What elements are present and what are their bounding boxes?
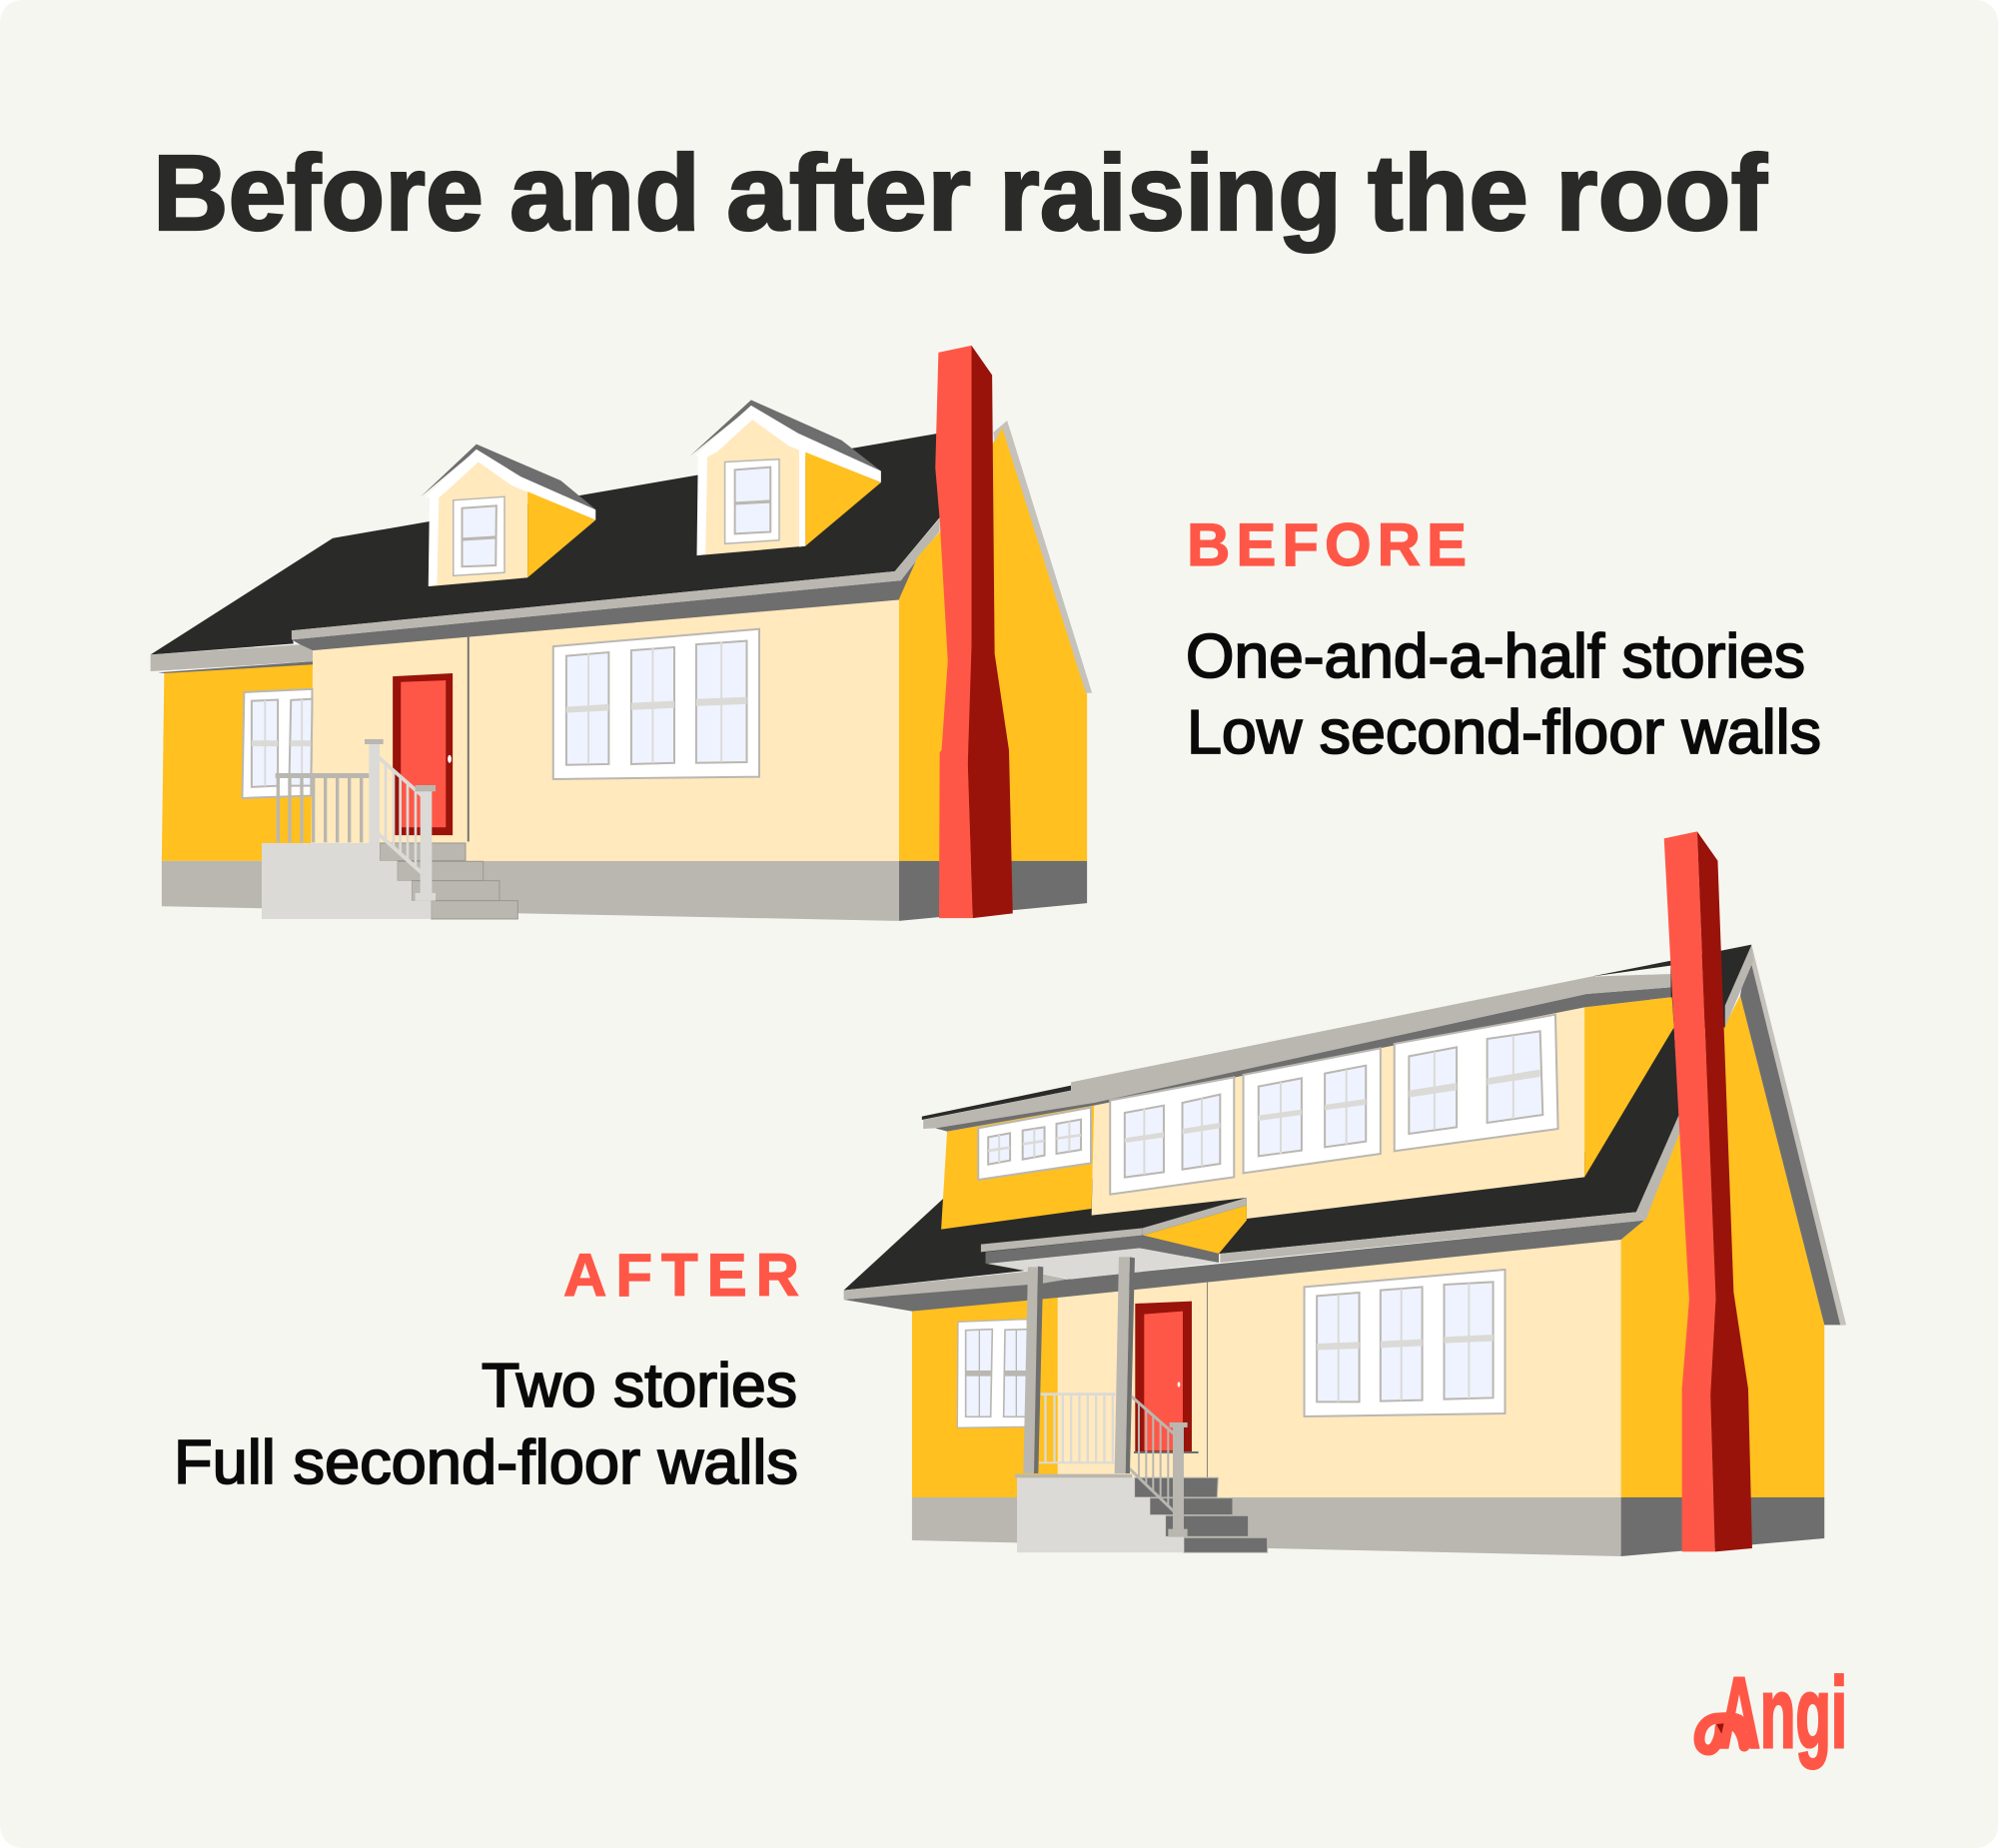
steps — [380, 843, 517, 919]
steps — [1135, 1477, 1268, 1552]
roof — [151, 434, 941, 654]
left fascia — [151, 643, 313, 673]
eave fascia — [844, 1212, 1645, 1312]
dormer 1 — [421, 445, 595, 586]
chimney — [935, 346, 1013, 918]
left wing wall — [162, 663, 313, 861]
after description: Full second-floor walls — [174, 1428, 798, 1497]
stair railing — [365, 739, 436, 901]
before description: One-and-a-half stories — [1186, 622, 1805, 691]
stair railing — [1130, 1394, 1188, 1537]
after description — [174, 1352, 798, 1497]
title — [153, 132, 1768, 253]
title: the — [1368, 132, 1528, 253]
porch railing — [276, 773, 369, 842]
entry porch — [957, 1257, 1268, 1552]
heading: after: AFTER — [563, 1242, 799, 1309]
roof — [844, 945, 1751, 1291]
porch railing — [1039, 1392, 1116, 1463]
gable edge — [1740, 945, 1846, 1325]
right gable wall — [899, 425, 1087, 861]
title: raising — [999, 132, 1342, 253]
dormer 2 — [690, 400, 881, 555]
logo: Angi: Angi — [1718, 1657, 1847, 1769]
front fascia — [292, 518, 940, 650]
main window — [553, 629, 759, 779]
upper fascia — [923, 974, 1670, 1132]
front wall — [1058, 1240, 1621, 1497]
title: roof — [1555, 132, 1768, 253]
door trim line — [468, 637, 470, 841]
before description: Low second-floor walls — [1187, 698, 1821, 767]
door — [393, 673, 453, 835]
logo: Angi — [1699, 1657, 1847, 1769]
left window — [242, 689, 312, 798]
title: Before — [153, 132, 484, 253]
upper window bars — [988, 1036, 1540, 1175]
front wall — [311, 599, 899, 861]
upper windows — [978, 1015, 1558, 1195]
stoop — [1017, 1477, 1184, 1552]
chimney — [1664, 831, 1752, 1551]
foundation side — [1621, 1497, 1824, 1556]
after description: Two stories — [482, 1352, 797, 1420]
left wing wall — [912, 1296, 1058, 1497]
door — [1134, 1302, 1199, 1453]
second floor side wall — [1584, 997, 1674, 1177]
illustration: house after — [844, 831, 1846, 1556]
porch columns — [1023, 1257, 1135, 1473]
foundation side — [899, 861, 1087, 921]
heading: before: BEFORE — [1187, 511, 1467, 578]
gable wall — [1621, 996, 1824, 1497]
second floor left wall — [941, 1106, 1094, 1230]
gable edge — [993, 421, 1092, 693]
foundation front — [162, 861, 899, 921]
door trim line — [1206, 1282, 1209, 1478]
entry stairs and railing — [262, 739, 517, 919]
before description — [1186, 622, 1821, 767]
title: and — [509, 132, 700, 253]
porch gable — [981, 1198, 1247, 1280]
foundation front — [912, 1497, 1621, 1556]
title: after — [726, 132, 971, 253]
second floor front wall — [1092, 1007, 1584, 1219]
left window — [957, 1320, 1027, 1427]
roof edge light — [1636, 945, 1753, 1221]
illustration: house before — [151, 346, 1092, 921]
main window — [1305, 1270, 1505, 1416]
stoop — [262, 843, 432, 919]
